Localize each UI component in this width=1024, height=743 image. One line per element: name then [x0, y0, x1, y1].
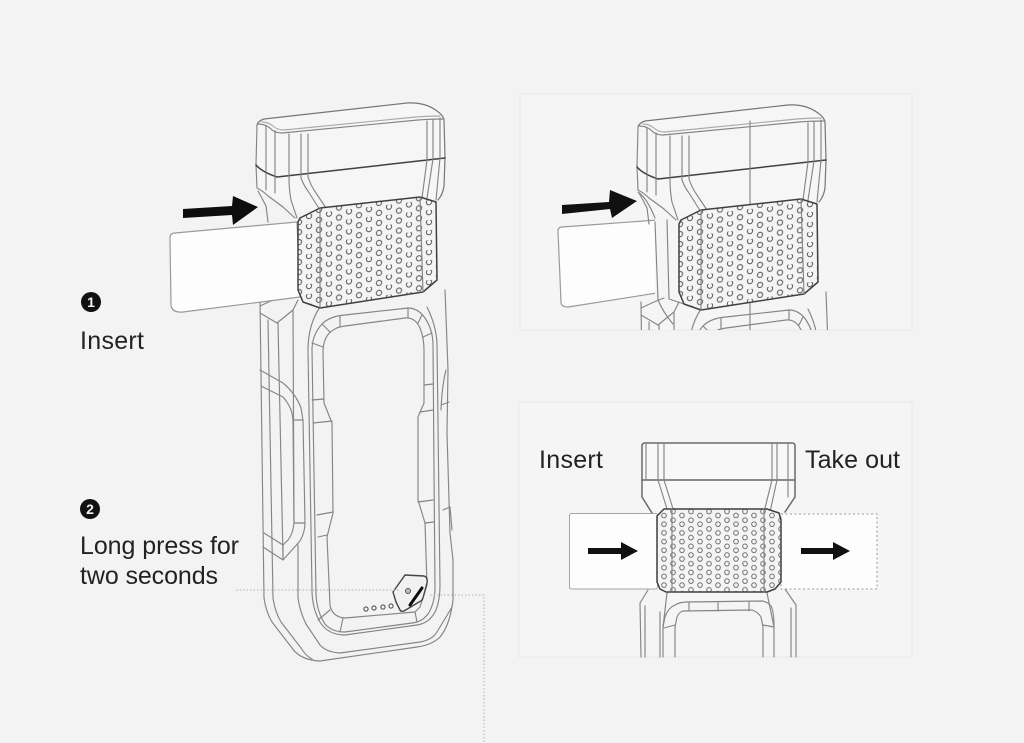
step 2 text: Long press for	[80, 532, 239, 560]
arrow: insert	[588, 542, 638, 560]
arrow: take out	[801, 542, 850, 560]
power button with indicator dots	[364, 575, 427, 611]
device front view	[640, 443, 796, 657]
step 1 text: Insert	[80, 327, 144, 355]
device cap and neck	[256, 103, 445, 222]
device close-up outline	[636, 104, 828, 330]
step 1 badge: 1	[87, 294, 95, 310]
mesh front view	[657, 509, 781, 592]
label: insert: Insert	[539, 446, 603, 474]
card being inserted	[170, 222, 300, 312]
panel: insert close-up	[520, 94, 912, 330]
mesh close-up	[679, 199, 818, 310]
step 2 badge	[80, 499, 100, 519]
panel: insert and take out	[519, 402, 912, 657]
dotted callout line	[236, 590, 484, 743]
perforated mesh band	[298, 197, 437, 308]
right card: take out	[781, 514, 877, 589]
step 2 label: two seconds	[80, 562, 218, 590]
step 2 badge: 2	[86, 501, 94, 517]
panel: main device illustration	[170, 103, 484, 743]
step 2 label	[80, 499, 239, 590]
label: take out: Take out	[805, 446, 900, 474]
device body outline	[260, 290, 453, 661]
step 1 label	[80, 292, 144, 355]
arrow: insert close-up	[562, 190, 637, 218]
arrow: insert direction	[183, 196, 258, 225]
card behind device	[558, 220, 657, 307]
left card: insert	[570, 514, 658, 589]
